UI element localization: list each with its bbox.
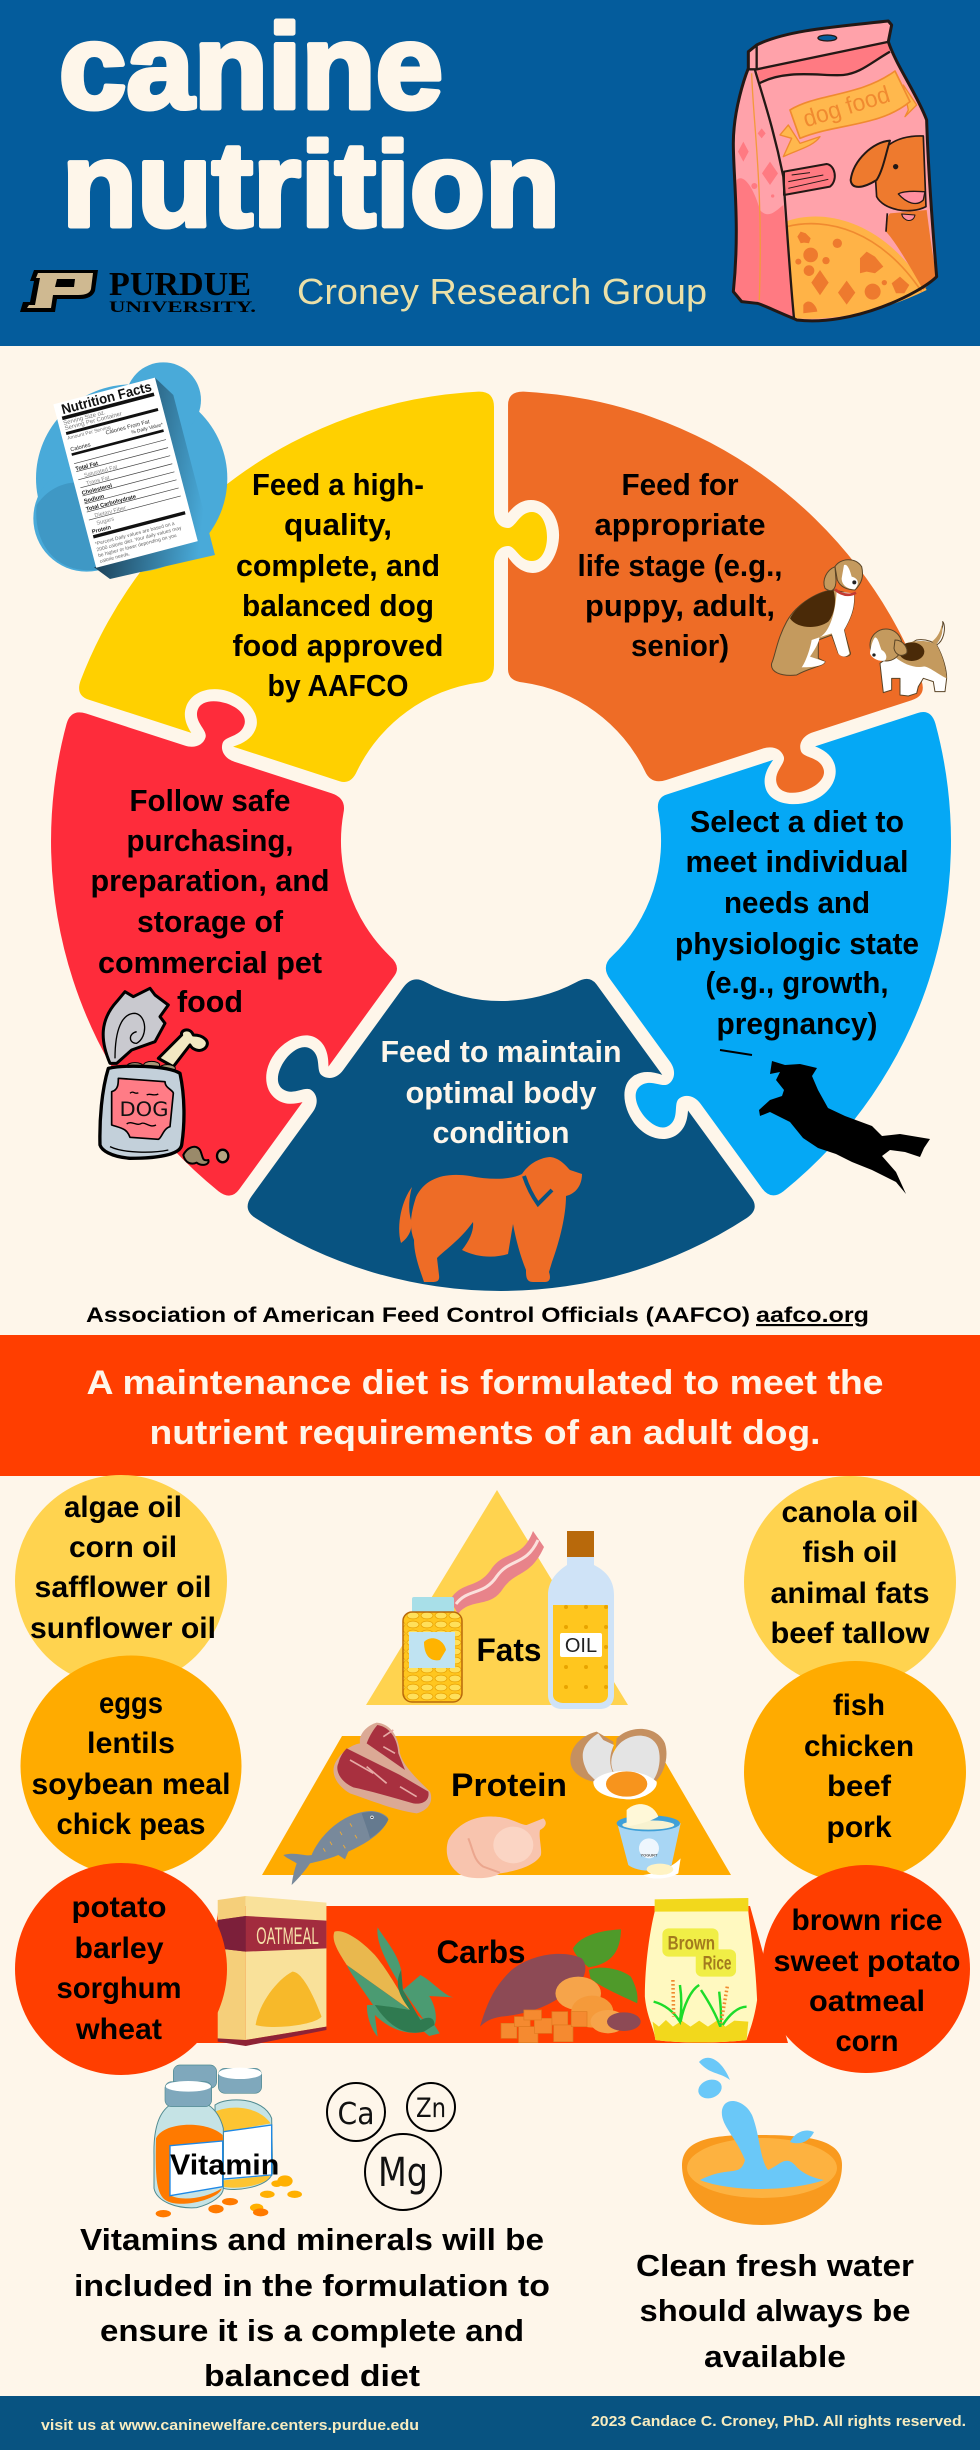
text: follow safe purchasing: storage of (137, 905, 284, 939)
icon: nutrition facts label on blue blob: Cholesterol (81, 483, 113, 497)
text: vitamins and minerals: Vitamins and minerals will be (80, 2222, 544, 2257)
bubble: protein sources left: chick peas (56, 1808, 206, 1841)
text: feed to maintain: optimal body (406, 1076, 597, 1110)
icon: nutrition facts label on blue blob: Calories From Fat (105, 419, 151, 437)
bubble: fat sources right: fish oil (802, 1536, 898, 1569)
title: canine nutrition: nutrition (62, 118, 560, 252)
icon: yogurt cup (617, 1804, 681, 1879)
bubble: carb sources right: oatmeal (809, 1985, 925, 2018)
text: feed for appropriate life stage: senior) (631, 629, 729, 663)
panel: red puzzle piece - safe storage (0, 658, 459, 1224)
icon: nutrition facts label on blue blob: Calories (70, 442, 92, 453)
text: feed for appropriate life stage: Feed for (622, 468, 739, 502)
text: feed a high-quality food: food approved (232, 629, 444, 663)
icon: mineral circles: Ca (338, 2097, 374, 2132)
icon: nutrition facts label on blue blob: Serving Size oz. (63, 410, 107, 427)
AAFCO source line: Association of American Feed Control Officials (AAFCO) (86, 1303, 750, 1327)
sub-icon: banner: dog food (800, 81, 893, 133)
Purdue University logo: UNIVERSITY. (109, 299, 256, 316)
icon: orange dog (399, 1157, 582, 1282)
icon: nutrition facts label on blue blob: Trans Fat (86, 475, 111, 487)
icon: steak (334, 1723, 431, 1813)
icon: nutrition facts label on blue blob: Sodium (83, 494, 105, 505)
text: feed to maintain: condition (432, 1116, 570, 1150)
text: clean fresh water: Clean fresh water (636, 2248, 914, 2283)
text: select a diet: (e.g., growth, (706, 966, 888, 1000)
icon: nutrition facts label on blue blob: 2000 calorie diet. Your daily values may (96, 525, 183, 553)
text: follow safe purchasing (90, 784, 330, 1019)
text: feed to maintain: Feed to maintain (380, 1035, 622, 1069)
icon: nutrition facts label on blue blob: Sugars (96, 516, 115, 527)
text: feed for appropriate life stage: appropriate (594, 508, 766, 542)
banner: maintenance diet: A maintenance diet is formulated to meet the (86, 1364, 884, 1402)
bubble: carb sources right: brown rice (792, 1904, 942, 1937)
text: select a diet (675, 805, 919, 1041)
sub-icon: banner (780, 71, 917, 157)
icon: mineral circles: Mg (378, 2150, 428, 2196)
bubble: protein sources left: eggs (99, 1687, 163, 1720)
bubble: fat sources left: algae oil (64, 1491, 182, 1524)
sub-icon: beagle puppy (870, 622, 947, 696)
sub-icon: adult beagle (771, 560, 863, 675)
bubble: fat sources left: sunflower oil (30, 1612, 216, 1645)
text: feed a high-quality food: by AAFCO (268, 669, 408, 703)
text: select a diet: pregnancy) (716, 1007, 878, 1041)
title: canine nutrition: canine (59, 0, 443, 134)
group name: Croney Research Group (297, 271, 707, 312)
icon: oatmeal box: OATMEAL (256, 1924, 319, 1950)
header band (0, 0, 980, 346)
icon: brown rice bag: Brown (668, 1933, 715, 1954)
panel: orange puzzle piece - life stage (427, 301, 947, 867)
text: follow safe purchasing: Follow safe (130, 784, 290, 818)
icon: vitamin bottles (154, 2065, 302, 2217)
bubble: fat sources right: canola oil (782, 1496, 918, 1529)
bubble: fat sources left: corn oil (69, 1531, 177, 1564)
text: select a diet: meet individual (686, 845, 908, 879)
text: feed for appropriate life stage (578, 468, 782, 663)
banner: maintenance diet: nutrient requirements of an adult dog. (150, 1414, 820, 1452)
text: vitamins and minerals: ensure it is a complete and (100, 2313, 524, 2348)
icon: nutrition facts label on blue blob: Total Carbohydrate (85, 494, 137, 513)
footer band: visit us at www.caninewelfare.centers.purdue.edu (41, 2417, 419, 2434)
bubble: protein sources right: pork (826, 1811, 892, 1844)
text: select a diet: needs and (724, 886, 870, 920)
Purdue University logo: PURDUE (109, 266, 251, 303)
text: feed a high-quality food: quality, (284, 508, 392, 542)
bubble: carb sources right: sweet potato (774, 1945, 960, 1978)
icon: fish oil capsule bottle (403, 1597, 462, 1702)
icon: fish (283, 1811, 388, 1885)
icons: carb foods (218, 1896, 757, 2046)
icon: cracked egg (570, 1729, 666, 1799)
footer band: 2023 Candace C. Croney, PhD. All rights reserved. (591, 2413, 966, 2430)
text: feed a high-quality food: complete, and (236, 549, 440, 583)
icon: nutrition facts label on blue blob: Total Fat (75, 461, 99, 473)
icon: nutrition facts label on blue blob: Saturated Fat (83, 464, 119, 479)
icon: nutrition facts label on blue blob: Protein (91, 525, 112, 536)
icons: protein foods (283, 1723, 681, 1885)
text: follow safe purchasing: purchasing, (126, 824, 294, 858)
footer band (0, 2396, 980, 2450)
panel: navy puzzle piece - body condition (200, 862, 808, 1453)
icon: nutrition facts label on blue blob: Dietary Fiber (94, 505, 127, 519)
text: follow safe purchasing: food (177, 985, 243, 1019)
Purdue University logo (20, 266, 256, 316)
bubble: protein sources right: fish (833, 1689, 885, 1722)
icon: dog food can (100, 988, 228, 1165)
icon: two beagles (771, 560, 947, 696)
label: fats: Fats (476, 1632, 542, 1668)
pyramid tier: protein (262, 1723, 731, 1885)
icon: nutrition facts label on blue blob: Amount Per Serving (67, 425, 112, 442)
icon: nutrition facts label on blue blob: calorie needs. (99, 551, 131, 565)
text: feed to maintain (380, 1035, 622, 1150)
bubble: protein sources right (744, 1661, 966, 1883)
label: carbs: Carbs (436, 1934, 526, 1970)
bubble: protein sources left (20, 1656, 242, 1876)
bubble: carb sources left: barley (74, 1932, 164, 1965)
bubble: protein sources right: beef (827, 1770, 892, 1803)
bubble: fat sources left: safflower oil (34, 1571, 212, 1604)
bubble: protein sources right: chicken (804, 1730, 914, 1763)
bubble: carb sources left: sorghum (56, 1972, 182, 2005)
bubble: carb sources right (762, 1865, 970, 2073)
icon: nutrition facts label on blue blob: % Daily Value* (131, 422, 164, 436)
icon: nutrition facts label on blue blob: *Percent Daily values are based on a (95, 521, 176, 547)
text: vitamins and minerals: balanced diet (204, 2358, 420, 2393)
pyramid tier: fats (366, 1490, 628, 1709)
bubble: fat sources right (744, 1476, 956, 1688)
icon: dog food bag (733, 21, 937, 321)
text: follow safe purchasing: preparation, and (90, 864, 330, 898)
text: feed a high-quality food: balanced dog (242, 589, 434, 623)
icon: sweet potato (480, 1929, 641, 2043)
icon: oatmeal box (218, 1896, 326, 2046)
banner: maintenance diet (0, 1335, 980, 1476)
icon: nutrition facts label on blue blob: Nutrition Facts (60, 378, 153, 417)
icon: nutrition facts label on blue blob: Serving Per Container (64, 411, 123, 432)
icon: bacon (450, 1531, 544, 1614)
bubble: protein sources left: soybean meal (32, 1768, 230, 1801)
icon: yogurt cup: YOGURT (640, 1853, 658, 1858)
icon: oil bottle: OIL (565, 1635, 597, 1657)
icon: brown rice bag (645, 1898, 757, 2042)
icon: mineral circles (327, 2083, 455, 2210)
icon: water bowl (682, 2058, 842, 2225)
icon: leaping black dog (720, 1050, 930, 1194)
bubble: carb sources left: wheat (75, 2013, 162, 2046)
text: follow safe purchasing: commercial pet (98, 946, 322, 980)
icon: corn (334, 1927, 454, 2037)
icon: raw chicken (447, 1816, 546, 1878)
icon: mineral circles: Zn (416, 2093, 446, 2124)
title: canine nutrition (59, 0, 560, 252)
bubble: fat sources right: beef tallow (770, 1617, 930, 1650)
icon: nutrition facts label on blue blob (33, 362, 227, 579)
text: select a diet: Select a diet to (690, 805, 904, 839)
text: clean fresh water (636, 2248, 914, 2374)
text: feed a high-quality food (232, 468, 444, 703)
icon: vitamin bottles: Vitamin (170, 2149, 279, 2181)
text: feed a high-quality food: Feed a high- (252, 468, 424, 502)
panel: blue puzzle piece - individual needs (498, 641, 980, 1232)
text: vitamins and minerals: included in the formulation to (74, 2268, 550, 2303)
icon: oil bottle (548, 1531, 614, 1709)
bubble: fat sources right: animal fats (770, 1577, 930, 1610)
text: vitamins and minerals (74, 2222, 550, 2393)
icon: nutrition facts label on blue blob: be higher or lower depending on you (98, 533, 178, 559)
bubble: carb sources right: corn (836, 2025, 898, 2058)
bubble: protein sources left: lentils (87, 1727, 175, 1760)
bubble: carb sources left (15, 1863, 227, 2075)
icon: dog food can: DOG (119, 1098, 168, 1121)
text: clean fresh water: should always be (640, 2293, 910, 2328)
text: feed for appropriate life stage: puppy, adult, (585, 589, 775, 623)
AAFCO source line: aafco.org (756, 1303, 869, 1327)
bubble: carb sources left: potato (72, 1891, 166, 1924)
text: select a diet: physiologic state (675, 927, 919, 961)
label: protein: Protein (451, 1767, 567, 1803)
panel: yellow puzzle piece - feed high quality (33, 362, 547, 782)
pyramid tier: carbs (197, 1896, 788, 2046)
icon: brown rice bag: Rice (703, 1953, 731, 1974)
bubble: fat sources left (15, 1475, 227, 1687)
text: clean fresh water: available (704, 2339, 846, 2374)
text: feed for appropriate life stage: life stage (e.g., (578, 549, 782, 583)
